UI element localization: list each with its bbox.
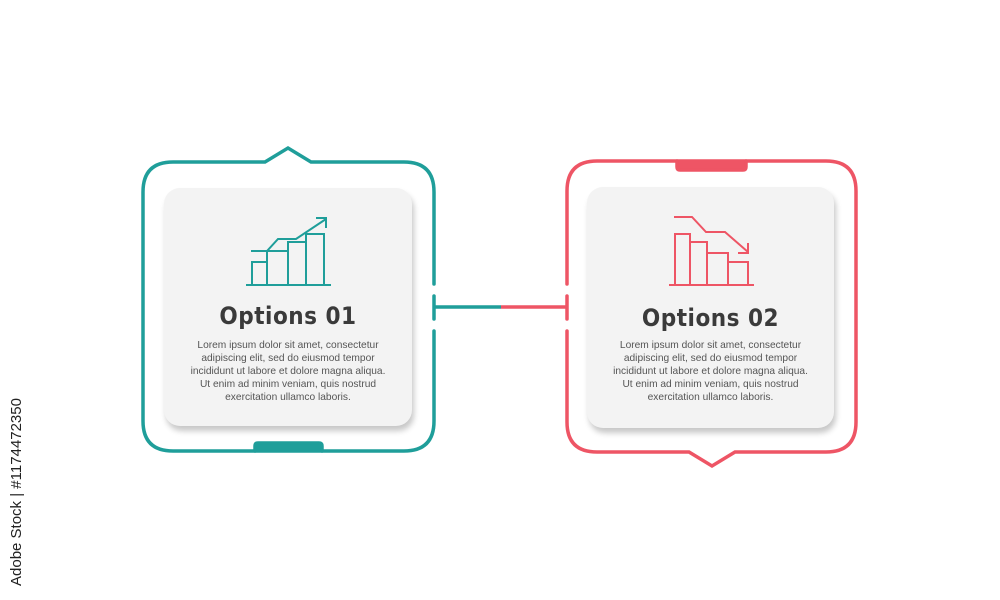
text block bbox=[613, 340, 808, 403]
icon: rising bar chart bbox=[246, 217, 331, 286]
text block: Ut enim ad minim veniam, quis nostrud bbox=[200, 379, 376, 390]
connector bbox=[434, 305, 567, 309]
text block: Lorem ipsum dolor sit amet, consectetur bbox=[197, 340, 379, 351]
text block: exercitation ullamco laboris. bbox=[225, 392, 351, 403]
heading: Options 01 bbox=[219, 302, 357, 330]
frame: option 2 bbox=[567, 161, 856, 466]
text block: Ut enim ad minim veniam, quis nostrud bbox=[622, 379, 799, 390]
text block: exercitation ullamco laboris. bbox=[648, 392, 773, 403]
frame: option 1 bbox=[143, 148, 434, 451]
icon: falling bar chart bbox=[669, 216, 754, 286]
text block bbox=[191, 340, 385, 403]
text block: Lorem ipsum dolor sit amet, consectetur bbox=[620, 340, 801, 351]
text block: adipiscing elit, sed do eiusmod tempor bbox=[201, 353, 375, 364]
heading: Options 02 bbox=[642, 304, 779, 332]
panel: option 2 card bbox=[587, 187, 834, 428]
panel: option 1 card bbox=[164, 188, 412, 426]
text block: incididunt ut labore et dolore magna aliqua. bbox=[191, 366, 385, 377]
text block: adipiscing elit, sed do eiusmod tempor bbox=[624, 353, 797, 364]
text block: incididunt ut labore et dolore magna aliqua. bbox=[613, 366, 808, 377]
text: Adobe Stock | #1174472350 bbox=[8, 398, 25, 586]
